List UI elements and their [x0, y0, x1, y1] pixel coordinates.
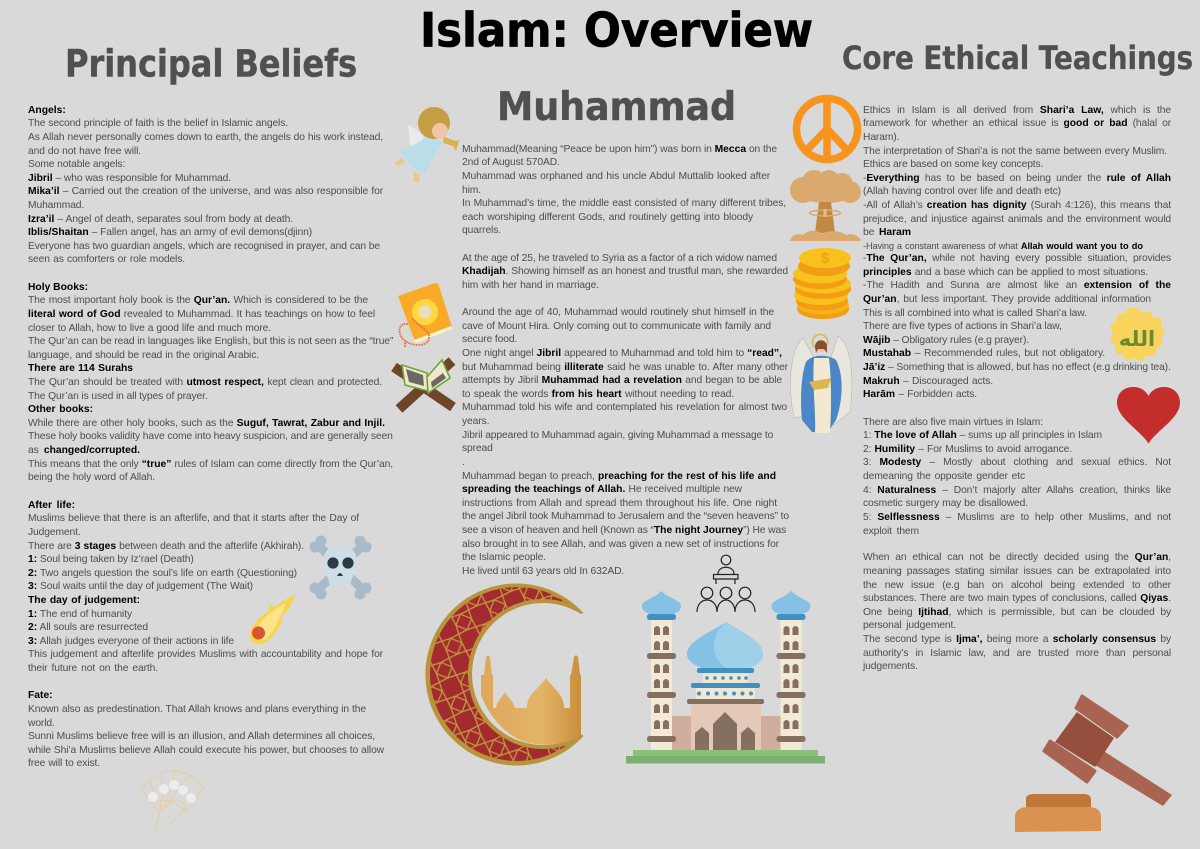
- text block: After life: There are 3 stages between death and the afterlife (Akhirah).: [28, 540, 304, 552]
- text block: Ethics and Sharia law: (Allah having control over life and death etc): [863, 186, 1061, 197]
- text block: Ethics and Sharia law: be Haram: [863, 227, 911, 238]
- text block: five virtues: 4: Naturalness – Don’t majorly alter Allahs creation, thinks like: [863, 485, 1171, 496]
- text block: five virtues: There are also five main virtues in Islam:: [863, 417, 1043, 428]
- text block: Angels: Everyone has two guardian angels, which are recognised in prayer, and can be: [28, 241, 380, 252]
- text block: Ethics and Sharia law: Wājib – Obligatory rules (e.g prayer).: [863, 335, 1029, 346]
- text block: Holy Books: [28, 282, 393, 483]
- text block: After life: 1: Soul being taken by Iz’rael (Death): [28, 554, 194, 565]
- text block: Muhammad early life: Muhammad was orphaned and his uncle Abdul Muttalib looked after: [462, 171, 770, 182]
- text block: Qiyas, Ijtihad and Ijma: [862, 552, 1172, 672]
- text block: Ethics and Sharia law: Qur’an, but less important. They provide additional information: [863, 294, 1151, 305]
- title: Islam: Overview: [420, 4, 813, 59]
- text block: Muhammad revelation: years.: [462, 416, 489, 427]
- text block: Muhammad early life: 2nd of August 570AD.: [462, 157, 560, 168]
- text block: Muhammad revelation: spread: [462, 443, 493, 454]
- text block: Fate: Known also as predestination. That Allah knows and plans everything in the: [28, 704, 366, 715]
- text block: Muhammad early life: him.: [462, 185, 481, 196]
- icon: skull and crossbones: [310, 536, 372, 600]
- text block: Muhammad preaching: He lived until 63 years old In 632AD.: [462, 566, 624, 577]
- text block: Ethics and Sharia law: Mustahab – Recommended rules, but not obligatory.: [863, 348, 1105, 359]
- text block: five virtues: demeaning the opposite gender etc: [863, 471, 1025, 482]
- heading: Principal Beliefs: Principal Beliefs: [65, 43, 357, 86]
- text block: Muhammad preaching: also brought in to see Allah, and was given a new set of instructions for: [462, 539, 779, 550]
- text block: After life: 3: Soul waits until the day of judgement (The Wait): [28, 581, 253, 592]
- text block: After life: 3: Allah judges everyone of their actions in life: [28, 636, 234, 647]
- text block: Muhammad marriage: [462, 253, 788, 291]
- text block: After life: The day of judgement:: [28, 595, 140, 606]
- text block: Muhammad early life: quarrels.: [462, 225, 501, 236]
- icon: stack of gold coins: [793, 248, 851, 319]
- text block: Muhammad revelation: [462, 307, 788, 468]
- text block: five virtues: 5: Selflessness – Muslims are to help other Muslims, and not: [863, 512, 1171, 523]
- text block: Holy Books: literal word of God revealed to Muhammad. It has teachings on how to feel: [28, 309, 375, 320]
- icon: falling meteor: [250, 595, 296, 644]
- text block: Qiyas, Ijtihad and Ijma: When an ethical can not be directly decided using the Qur’an,: [863, 552, 1171, 563]
- icon: teacher and audience: [697, 555, 755, 612]
- text block: Angels: Angels:: [28, 105, 66, 116]
- text block: Angels: Some notable angels:: [28, 159, 125, 170]
- icon: crescent with mosque silhouette: [425, 584, 584, 766]
- text block: Muhammad revelation: cave of Mount Hira. Only coming out to communicate with family and: [462, 321, 771, 332]
- text block: Ethics and Sharia law: The interpretation of Shari’a is not the same between every Muslim.: [863, 146, 1167, 157]
- text block: Ethics and Sharia law: prejudice, and injustice against animals and the environment would: [863, 214, 1171, 225]
- text block: After life: Judgement.: [28, 527, 81, 538]
- text block: Holy Books: The Qur’an is used in all types of prayer.: [28, 391, 208, 402]
- text block: Qiyas, Ijtihad and Ijma: One being Ijtihad, which is permissible, but can be clouded by: [863, 607, 1171, 618]
- text block: Muhammad marriage: At the age of 25, he traveled to Syria as a factor of a rich widow named: [462, 253, 777, 264]
- text block: Muhammad preaching: the angel Jibril took Muhammad to Jerusalem and the “seven heavens” to: [462, 511, 789, 522]
- text block: After life: 1: The end of humanity: [28, 609, 132, 620]
- text block: Muhammad early life: [462, 144, 786, 236]
- text block: Ethics and Sharia law: There are five types of actions in Shari’a law,: [863, 321, 1062, 332]
- text block: five virtues: exploit them: [863, 526, 919, 537]
- text block: Qiyas, Ijtihad and Ijma: The second type is Ijma’, being more a scholarly consensus by: [863, 634, 1171, 645]
- text block: After life: 2: All souls are resurrected: [28, 622, 148, 633]
- text block: Angels: Mika’il – Carried out the creation of the universe, and was also responsible for: [28, 186, 383, 197]
- text block: Muhammad marriage: Khadijah. Showing himself as an honest and trustful man, she rewarded: [462, 266, 788, 277]
- text block: Angels: Muhammad.: [28, 200, 84, 211]
- text block: Muhammad preaching: the Islamic people.: [462, 552, 546, 563]
- text block: Holy Books: The Qur’an should be treated with utmost respect, kept clean and protected.: [28, 377, 382, 388]
- text block: Muhammad early life: Muhammad(Meaning “Peace be upon him”) was born in Mecca on the: [462, 144, 777, 155]
- text block: Holy Books: This means that the only “true” rules of Islam can come directly from the Qur’an,: [28, 459, 393, 470]
- text block: Muhammad preaching: Muhammad began to preach, preaching for the rest of his life and: [462, 471, 776, 482]
- text block: Ethics and Sharia law: principles and a base which can be applied to most situations.: [863, 267, 1148, 278]
- icon: hand holding moon tarot cards: [141, 771, 204, 830]
- text block: Muhammad preaching: [462, 471, 789, 577]
- text block: Qiyas, Ijtihad and Ijma: personal judgement.: [863, 620, 956, 631]
- text block: Ethics and Sharia law: Harām – Forbidden acts.: [863, 389, 977, 400]
- illustration: mosque: [626, 591, 825, 764]
- text block: Ethics and Sharia law: -All of Allah’s creation has dignity (Surah 4:126), this means that: [863, 200, 1171, 211]
- text block: After life: This judgement and afterlife provides Muslims with accountability and hope for: [28, 649, 383, 660]
- text block: Ethics and Sharia law: -The Hadith and Sunna are almost like an extension of the: [863, 280, 1171, 291]
- text block: Ethics and Sharia law: -Everything has to be based on being under the rule of Allah: [863, 173, 1171, 184]
- icon: cherub with trumpet: [394, 106, 459, 182]
- text block: Angels: [28, 105, 383, 265]
- heading: Muhammad: Muhammad: [497, 85, 736, 130]
- text block: Holy Books: being the holy word of Allah.: [28, 472, 155, 483]
- text block: Qiyas, Ijtihad and Ijma: meaning passages stating similar issues can be extrapolated into: [863, 566, 1171, 577]
- icon: praying angel with blue robe: [791, 334, 852, 433]
- text block: five virtues: [863, 417, 1172, 537]
- text block: Qiyas, Ijtihad and Ijma: substances. There are two main types of conclusions, called Qiyas.: [863, 593, 1171, 604]
- text block: After life: [28, 500, 383, 674]
- text block: Angels: Izra’il – Angel of death, separates soul from body at death.: [28, 214, 293, 225]
- icon: Allah calligraphy seal: [1110, 308, 1165, 362]
- text block: Ethics and Sharia law: Ethics in Islam is all derived from Shari’a Law, which is the: [863, 105, 1171, 116]
- text block: Holy Books: Other books:: [28, 404, 93, 415]
- text block: Fate: Sunni Muslims believe free will is an illusion, and Allah determines all choices,: [28, 731, 375, 742]
- text block: Ethics and Sharia law: framework for whether an ethical issue is good or bad (halal or: [863, 118, 1171, 129]
- text block: Ethics and Sharia law: -The Qur’an, while not having every possible situation, provides: [863, 253, 1171, 264]
- text block: After life: their future not on the earth.: [28, 663, 158, 674]
- icon: open book on wooden stand: [394, 360, 453, 409]
- text block: Muhammad revelation: to speak the words from his heart without needing to read.: [462, 389, 734, 400]
- text block: Ethics and Sharia law: Makruh – Discouraged acts.: [863, 376, 993, 387]
- text block: five virtues: 1: The love of Allah – sums up all principles in Islam: [863, 430, 1102, 441]
- text block: Ethics and Sharia law: Jā’iz – Something that is allowed, but has no effect (e.g drinking tea).: [863, 362, 1171, 373]
- text block: Holy Books: The most important holy book is the Qur’an. Which is considered to be the: [28, 295, 368, 306]
- icon: stack of gold coins: $: [821, 250, 830, 267]
- text block: Muhammad revelation: but Muhammad being illiterate said he was unable to. After many other: [462, 362, 788, 373]
- text block: five virtues: 3: Modesty – Mostly about clothing and sexual ethics. Not: [863, 457, 1171, 468]
- text block: Holy Books: Holy Books:: [28, 282, 88, 293]
- text block: Angels: seen as comforters or role models.: [28, 254, 185, 265]
- text block: Qiyas, Ijtihad and Ijma: judgements.: [863, 661, 918, 672]
- text block: five virtues: 2: Humility – For Muslims to avoid arrogance.: [863, 444, 1072, 455]
- icon: red heart: [1117, 387, 1180, 444]
- icon: peace symbol: [796, 98, 858, 160]
- text block: Muhammad revelation: One night angel Jibril appeared to Muhammad and told him to “read”,: [462, 348, 782, 359]
- icon: Quran book with prayer beads: [398, 283, 452, 347]
- icon: Allah calligraphy seal: الله: [1119, 327, 1155, 351]
- text block: Fate: free will to exist.: [28, 758, 100, 769]
- text block: Qiyas, Ijtihad and Ijma: authority’s in Islamic law, and are trusted more than personal: [863, 648, 1171, 659]
- text block: Ethics and Sharia law: -Having a constant awareness of what Allah would want you to do: [863, 241, 1143, 251]
- text block: Angels: Jibril – who was responsible for Muhammad.: [28, 173, 231, 184]
- icon: mushroom cloud explosion: [790, 170, 861, 241]
- text block: Ethics and Sharia law: [863, 105, 1172, 400]
- text block: Muhammad preaching: instructions from Allah and spread them throughout his life. One night: [462, 498, 777, 509]
- text block: Ethics and Sharia law: Ethics are based on some key concepts.: [863, 159, 1043, 170]
- text block: Muhammad revelation: secure food.: [462, 334, 517, 345]
- text block: Holy Books: The Qur’an can be read in languages like English, but this is not seen as the “true”: [28, 336, 393, 347]
- text block: Muhammad preaching: spreading the teachings of Allah. He received multiple new: [462, 484, 742, 495]
- text block: Muhammad marriage: him with her hand in marriage.: [462, 280, 599, 291]
- text block: Ethics and Sharia law: This is all combined into what is called Shari’a law.: [863, 308, 1087, 319]
- text block: Muhammad revelation: Muhammad told his wife and contemplated his revelation for almost two: [462, 402, 787, 413]
- text block: Muhammad revelation: Jibril appeared to Muhammad again, giving Muhammad a message to: [462, 430, 773, 441]
- text block: Muhammad revelation: Around the age of 40, Muhammad would routinely shut himself in the: [462, 307, 774, 318]
- text block: Fate: Fate:: [28, 690, 53, 701]
- text block: Muhammad revelation: .: [462, 457, 465, 468]
- text block: Muhammad early life: In Muhammad’s time, the middle east consisted of many different tribes,: [462, 198, 786, 209]
- text block: Angels: Iblis/Shaitan – Fallen angel, has an army of evil demons(djinn): [28, 227, 312, 238]
- text block: Angels: and do not have free will.: [28, 146, 141, 157]
- text block: Muhammad preaching: see a vison of heaven and hell (Known as “The night Journey”) He was: [462, 525, 786, 536]
- text block: Ethics and Sharia law: Haram).: [863, 132, 899, 143]
- text block: Muhammad revelation: attempts by Jibril Muhammad had a revelation and began to be able: [462, 375, 782, 386]
- text block: Qiyas, Ijtihad and Ijma: the new issue (e.g ban on alcohol being extended to other: [863, 580, 1171, 591]
- text block: Holy Books: While there are other holy books, such as the Suguf, Tawrat, Zabur and Injil.: [28, 418, 385, 429]
- text block: Holy Books: as changed/corrupted.: [28, 445, 140, 456]
- text block: After life: Muslims believe that there is an afterlife, and that it starts after the Day of: [28, 513, 359, 524]
- text block: After life: 2: Two angels question the soul’s life on earth (Questioning): [28, 568, 297, 579]
- text block: Fate: world.: [28, 718, 55, 729]
- text block: Fate: while Shi’a Muslims believe Allah could execute his power, but chooses to allow: [28, 745, 384, 756]
- text block: Angels: As Allah never personally comes down to earth, the angels do his work instead,: [28, 132, 383, 143]
- icon: judge gavel on sound block: [1015, 696, 1172, 832]
- text block: Fate: [28, 690, 384, 769]
- text block: Holy Books: closer to Allah, how to live a good life and much more.: [28, 323, 271, 334]
- text block: Holy Books: language, and should be read in the original Arabic.: [28, 350, 259, 361]
- text block: After life: After life:: [28, 500, 75, 511]
- text block: Holy Books: These holy books validity have come into heavy suspicion, and are generally seen: [28, 431, 393, 442]
- text block: Muhammad early life: each worshiping different Gods, and routinely getting into bloody: [462, 212, 753, 223]
- text block: five virtues: cosmetic surgery may be disallowed.: [863, 498, 1028, 509]
- text block: Holy Books: There are 114 Surahs: [28, 363, 133, 374]
- text block: Angels: The second principle of faith is the belief in Islamic angels.: [28, 118, 288, 129]
